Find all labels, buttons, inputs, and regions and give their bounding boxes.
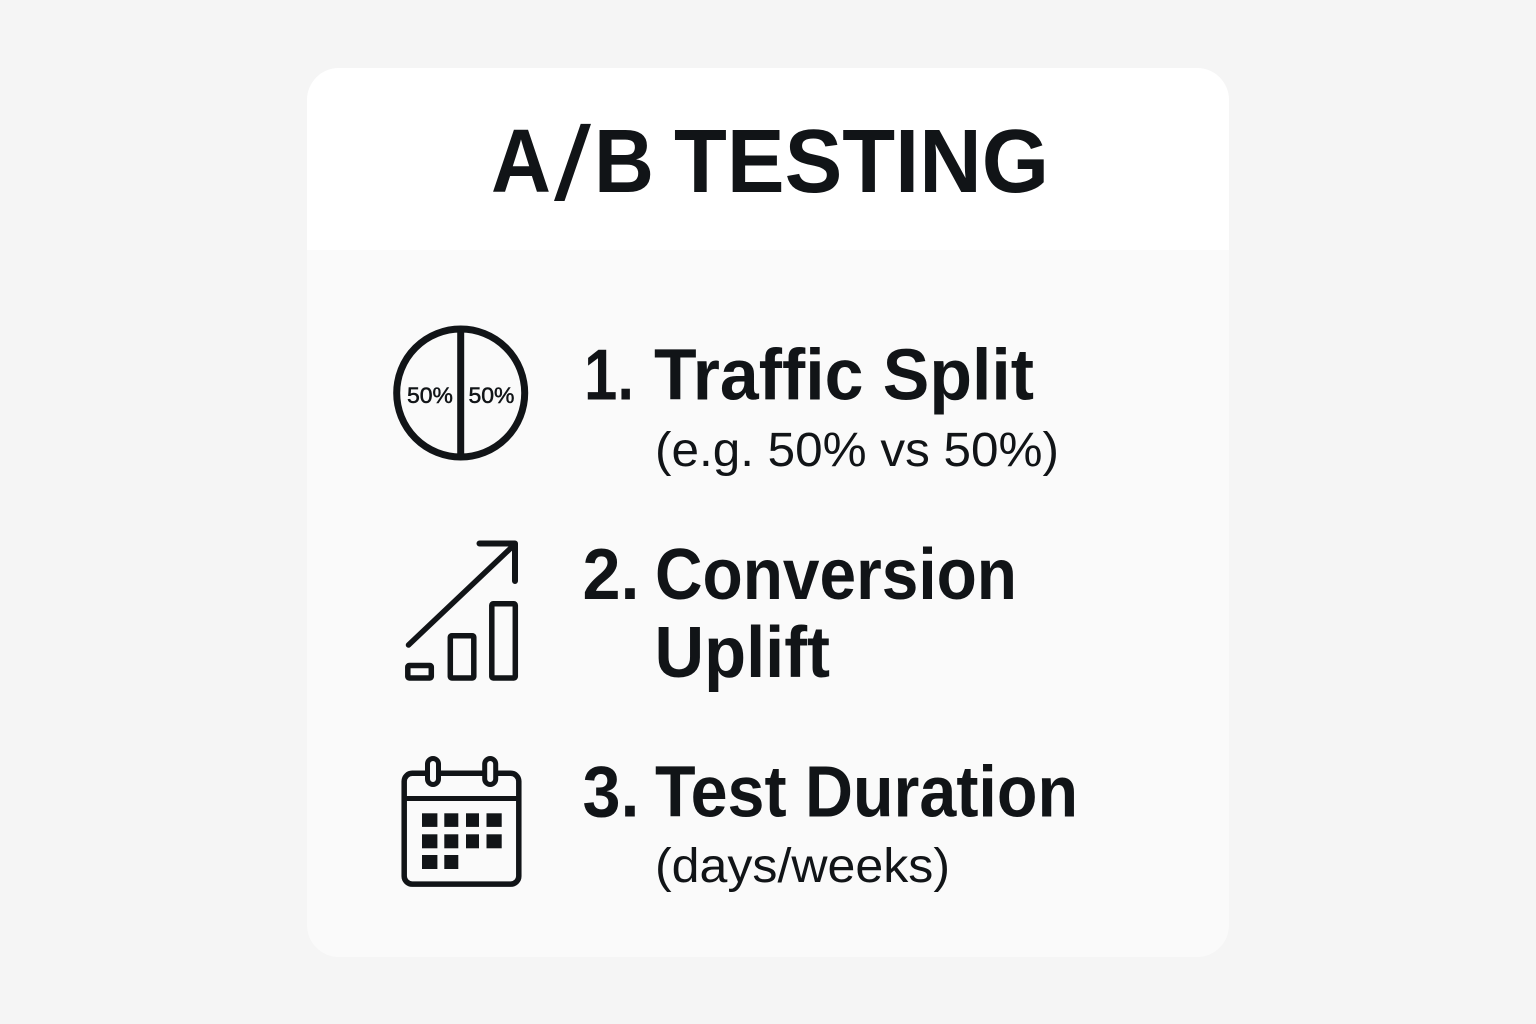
text: duration units: (days/weeks) (655, 840, 950, 893)
icon: split circle: 50% (407, 383, 453, 408)
icon: split circle: 50% (468, 383, 514, 408)
title: / (554, 106, 592, 223)
heading number: 1: 1. (584, 336, 634, 416)
icon: split circle (397, 326, 525, 460)
title: A (491, 112, 551, 212)
icon: calendar (404, 758, 519, 884)
icon: uplift chart (408, 544, 515, 678)
heading number: 3: 3. (582, 752, 640, 832)
title: B (594, 112, 654, 212)
heading: traffic split: Traffic Split (654, 336, 1034, 416)
heading number: 2: 2. (582, 535, 640, 615)
panel: card (307, 68, 1229, 250)
text: split example: (e.g. 50% vs 50%) (655, 424, 1059, 477)
title (491, 106, 1049, 223)
heading: test duration: Test Duration (655, 752, 1078, 832)
infographic (307, 68, 1229, 892)
heading: uplift: Uplift (654, 613, 830, 693)
title: TESTING (674, 112, 1049, 212)
row: traffic split (397, 326, 1059, 477)
heading: conversion: Conversion (655, 535, 1017, 615)
panel: header band (307, 68, 1229, 250)
row: conversion uplift (408, 535, 1017, 693)
row: test duration (404, 752, 1078, 893)
